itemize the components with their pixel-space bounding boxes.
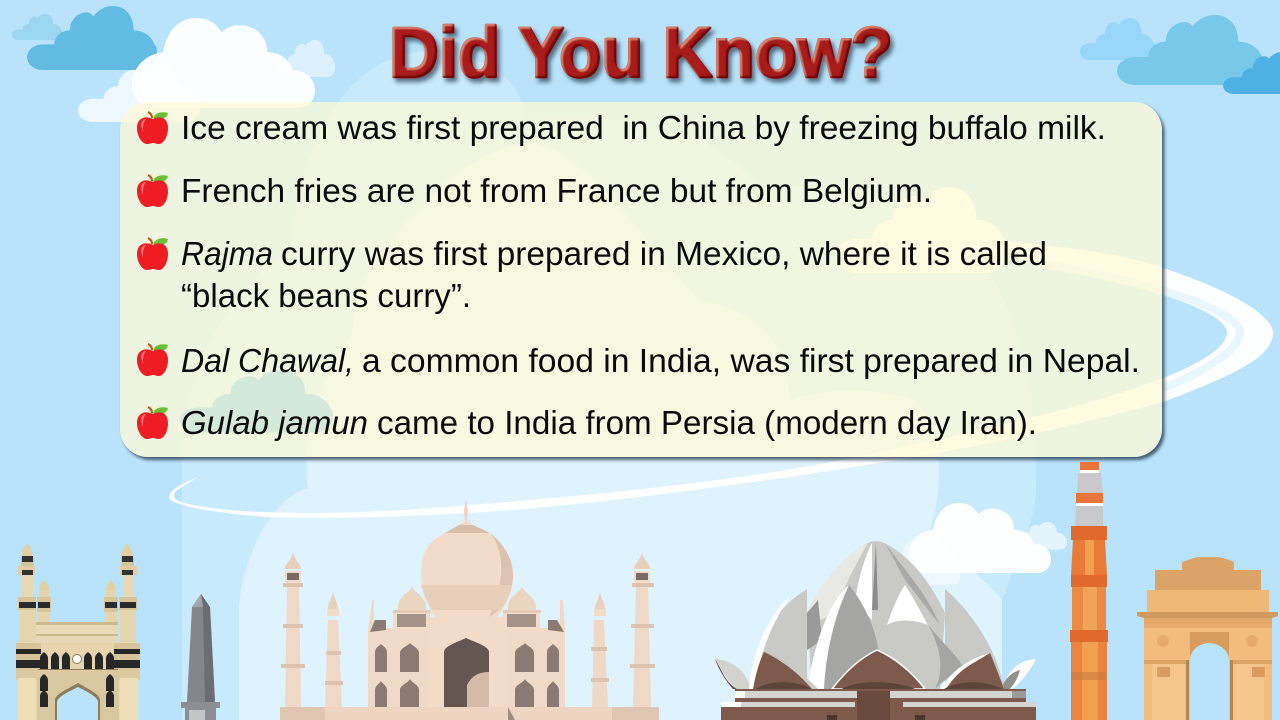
panel shadow bbox=[120, 102, 1162, 457]
icon: apple bbox=[137, 344, 168, 376]
cloud: big blue left bbox=[27, 6, 157, 70]
fact 3 bbox=[137, 235, 1047, 314]
cloud: white bottom bbox=[909, 503, 1051, 573]
cloud: small white bottom bbox=[1010, 522, 1067, 550]
cloud: mid blue top right bbox=[1117, 15, 1265, 85]
pale inner halo bbox=[239, 143, 1002, 720]
landmark: Lotus Temple bbox=[715, 541, 1036, 720]
cloud: pale small right of white bbox=[275, 40, 335, 77]
cloud: white behind left bbox=[78, 64, 200, 122]
landmark: Charminar bbox=[16, 543, 140, 720]
fact 5: Gulab jamun bbox=[181, 404, 368, 441]
fact 2: French fries are not from France but from Belgium. bbox=[181, 172, 932, 209]
landmark: Qutub Minar bbox=[1070, 462, 1108, 720]
icon: apple bbox=[137, 238, 168, 270]
cloud: blue behind panel bbox=[180, 370, 333, 432]
fact 5: came to India from Persia (modern day Iran). bbox=[377, 404, 1037, 441]
panel: facts bbox=[120, 102, 1162, 457]
pale outer halo bbox=[182, 52, 1036, 720]
fact 3: Rajma bbox=[181, 235, 273, 272]
landmark: obelisk bbox=[181, 594, 220, 720]
cloud: dark blue top right bbox=[1223, 52, 1280, 94]
fact 4: a common food in India, was first prepared in Nepal. bbox=[362, 342, 1140, 379]
fact 3: “black beans curry”. bbox=[181, 277, 471, 314]
cloud: small pale left bbox=[12, 14, 62, 40]
fact 1: Ice cream was first prepared in China by freezing buffalo milk. bbox=[181, 109, 1106, 146]
swoosh ribbon bbox=[169, 236, 1273, 518]
icon: apple bbox=[137, 112, 168, 144]
cloud: white behind panel bbox=[837, 187, 1007, 273]
icon: apple bbox=[137, 407, 168, 439]
cloud: pale top right bbox=[1080, 18, 1155, 60]
landmark: India Gate bbox=[1137, 557, 1278, 720]
cloud: big white bbox=[132, 18, 315, 108]
icon: apple bbox=[137, 175, 168, 207]
fact 4: Dal Chawal, bbox=[181, 342, 354, 379]
cloud: faint lower bottom bbox=[889, 540, 960, 585]
landmark: Taj Mahal bbox=[280, 499, 659, 720]
title: Did You Know? bbox=[389, 14, 893, 93]
fact 3: curry was first prepared in Mexico, where it is called bbox=[281, 235, 1047, 272]
